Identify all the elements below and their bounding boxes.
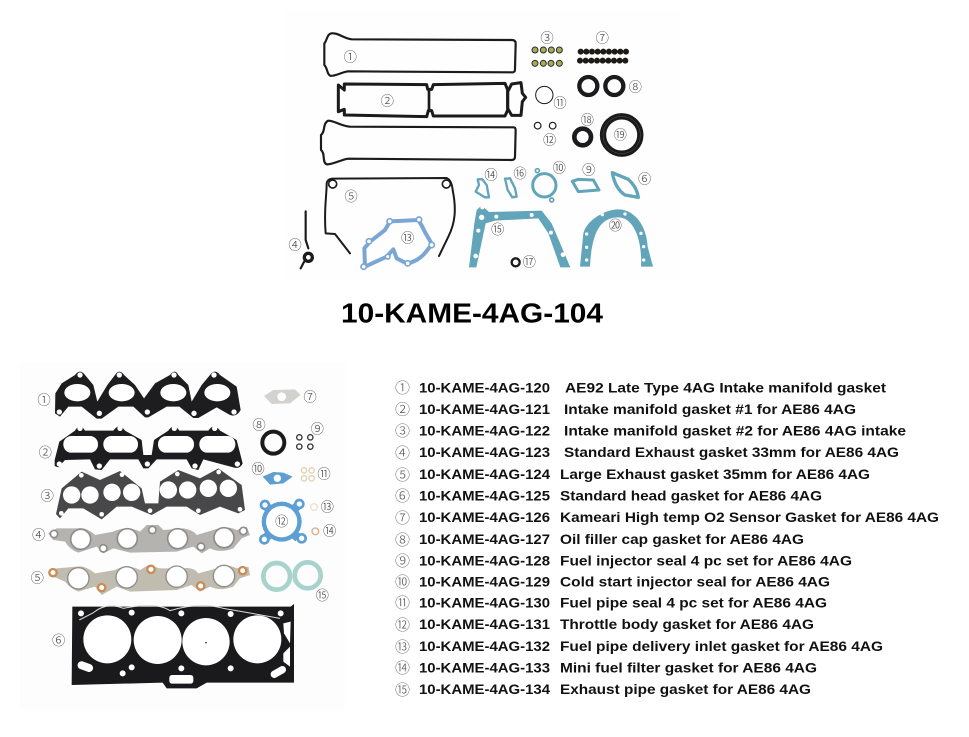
row 8: 10-KAME-4AG-127 [419,532,550,548]
row 11: 10-KAME-4AG-130 [419,596,550,612]
part 9: fuel injector seals: ⑨ [311,418,324,437]
row 1: AE92 Late Type 4AG Intake manifold gasket [565,380,886,396]
row 8: ⑧ [395,529,410,550]
gasket 3: olive valve stem seals [532,27,562,66]
row 15: ⑮ [395,679,410,700]
part 13: fuel pipe delivery inlet gasket [311,496,334,515]
gasket 7: black valve stem seals [577,27,629,64]
row 3: ③ [395,420,410,441]
row 7: Kameari High temp O2 Sensor Gasket for AE86 4AG [560,510,939,526]
gasket 1: valve cover gasket [324,33,516,76]
row 13 [395,636,883,657]
part 10: cold start injector seal: ⑩ [251,459,265,478]
row 10: 10-KAME-4AG-129 [419,574,550,590]
row 4: Standard Exhaust gasket 33mm for AE86 4AG [564,445,899,461]
title: 10-KAME-4AG-104 [341,298,604,328]
gasket 15: front oil pan gasket [469,205,570,267]
gasket 13: water pump gasket: ⑬ [401,227,414,246]
row 3: Intake manifold gasket #2 for AE86 4AG intake [564,424,906,440]
gasket 17: small seal [512,252,536,271]
part 6: head gasket: ⑥ [52,630,65,649]
part 4: exhaust manifold gasket 33mm: ④ [32,525,45,544]
part 15: exhaust pipe gaskets: ⑮ [316,585,329,604]
part 6: head gasket [52,604,294,688]
row 1 [395,377,886,398]
gasket 17: small seal: ⑰ [523,252,536,271]
row 7: 10-KAME-4AG-126 [419,510,550,526]
part 11: fuel pipe seals: ⑪ [317,464,331,483]
gasket 4: small timing gasket [288,211,312,268]
row 4: 10-KAME-4AG-123 [419,445,550,461]
gasket 13: water pump gasket [361,217,434,269]
gasket 1: valve cover gasket: ① [344,47,357,66]
row 2: ② [395,398,410,420]
gasket 19: rear main seal [603,116,640,154]
part 2: intake manifold gasket: ② [39,442,52,461]
gasket 5: timing cover gasket: ⑤ [344,186,358,205]
part 10: cold start injector seal [251,459,293,485]
row 2: 10-KAME-4AG-121 [419,402,550,418]
gasket 19: rear main seal: ⑲ [614,124,627,143]
row 8: Oil filler cap gasket for AE86 4AG [560,532,804,548]
row 9: Fuel injector seal 4 pc set for AE86 4AG [560,554,852,570]
row 9 [395,550,852,571]
gasket 18: oil seal [574,110,594,145]
row 15: 10-KAME-4AG-134 [419,682,550,698]
gasket 2: spark plug tube gasket [338,83,526,117]
gasket 9 [572,160,599,192]
gasket 12: small o-rings: ⑫ [543,130,556,149]
part 12: throttle body gasket: ⑫ [275,511,288,530]
gasket 12: small o-rings [534,122,556,149]
part 2: intake manifold gasket [39,426,243,470]
row 14: Mini fuel filter gasket for AE86 4AG [560,660,817,676]
gasket 20: rear oil pan gasket [580,209,653,267]
part 9: fuel injector seals [297,418,324,449]
row 9: 10-KAME-4AG-128 [419,554,550,570]
part 5: exhaust manifold gasket 35mm: ⑤ [31,567,44,586]
gasket 11: o-ring [536,86,567,112]
gasket 15: front oil pan gasket: ⑮ [491,219,504,238]
gasket 3: olive valve stem seals: ③ [540,27,554,46]
part 4: exhaust manifold gasket 33mm [32,525,250,553]
part 3: intake manifold gasket, four round ports [41,468,245,519]
row 1: ① [395,377,410,398]
row 7: ⑦ [395,507,410,528]
row 13: ⑬ [395,636,410,657]
row 5: ⑤ [395,464,410,485]
row 14: 10-KAME-4AG-133 [419,660,550,676]
row 3: 10-KAME-4AG-122 [419,424,550,440]
row 11: ⑪ [395,592,410,613]
row 6: 10-KAME-4AG-125 [419,488,550,504]
row 12 [395,614,814,635]
row 6 [395,485,822,506]
row 3 [395,420,906,441]
gasket 14: ⑭ [484,164,498,183]
row 10 [395,571,830,592]
gasket 6: small flange [612,168,651,197]
row 12: 10-KAME-4AG-131 [419,617,550,633]
row 2: Intake manifold gasket #1 for AE86 4AG [564,402,856,418]
part 13: fuel pipe delivery inlet gasket: ⑬ [321,496,334,515]
row 15: Exhaust pipe gasket for AE86 4AG [560,682,811,698]
row 12: Throttle body gasket for AE86 4AG [560,617,814,633]
row 5: Large Exhaust gasket 35mm for AE86 4AG [560,467,870,483]
part 8: oil filler cap gasket: ⑧ [252,415,266,434]
row 1: 10-KAME-4AG-120 [419,380,550,396]
part 15: exhaust pipe gaskets [263,562,329,604]
part 3: intake manifold gasket, four round ports: ③ [41,486,54,505]
part 12: throttle body gasket [259,499,307,545]
part 1: intake manifold gasket [37,372,241,419]
row 7 [395,507,939,528]
row 10: ⑩ [395,571,410,592]
part 5: exhaust manifold gasket 35mm [31,565,250,595]
gasket 16: ⑯ [513,163,527,182]
gasket 5: timing cover gasket [325,178,455,256]
row 13: 10-KAME-4AG-132 [419,639,550,655]
row 5 [395,464,870,485]
gasket 14 [476,164,498,197]
row 6: ⑥ [395,485,410,506]
panel: top-end gasket set photo [20,362,345,708]
part 1: intake manifold gasket: ① [37,390,51,409]
gasket 7: black valve stem seals: ⑦ [596,27,609,46]
gasket 16 [505,163,527,197]
gasket 2: spark plug tube gasket: ② [381,91,394,110]
part 8: oil filler cap gasket [252,415,284,454]
gasket 4: small timing gasket: ④ [288,235,302,254]
gasket 9: ⑨ [582,160,595,179]
row 9: ⑨ [395,550,410,571]
gasket 8: camshaft oil seals: ⑧ [629,77,642,96]
row 14 [395,657,817,678]
row 8 [395,529,804,550]
row 5: 10-KAME-4AG-124 [419,467,550,483]
panel: full engine gasket kit photo [285,12,678,280]
gasket 18: oil seal: ⑱ [581,110,594,129]
row 12: ⑫ [395,614,410,635]
row 4: ④ [395,442,410,463]
gasket 11: o-ring: ⑪ [553,93,567,112]
part 14: mini fuel filter gasket [312,521,336,540]
row 11 [395,592,827,613]
gasket 10 [533,158,566,202]
row 2 [395,398,856,420]
row 14: ⑭ [395,657,410,678]
gasket 10: ⑩ [553,158,566,177]
row 10: Cold start injector seal for AE86 4AG [560,574,830,590]
gasket: second valve cover gasket [321,121,516,164]
row 6: Standard head gasket for AE86 4AG [560,488,822,504]
row 4 [395,442,899,463]
row 13: Fuel pipe delivery inlet gasket for AE86 4AG [560,639,883,655]
part 14: mini fuel filter gasket: ⑭ [323,521,336,540]
parts list [395,377,939,700]
gasket 20: rear oil pan gasket: ⑳ [609,215,622,234]
part 11: fuel pipe seals [301,464,331,483]
row 11: Fuel pipe seal 4 pc set for AE86 4AG [560,596,827,612]
part 7: O2 sensor gasket: ⑦ [303,386,317,405]
row 15 [395,679,811,700]
gasket 8: camshaft oil seals [579,77,642,96]
part 7: O2 sensor gasket [264,386,317,405]
gasket 6: small flange: ⑥ [638,168,651,187]
